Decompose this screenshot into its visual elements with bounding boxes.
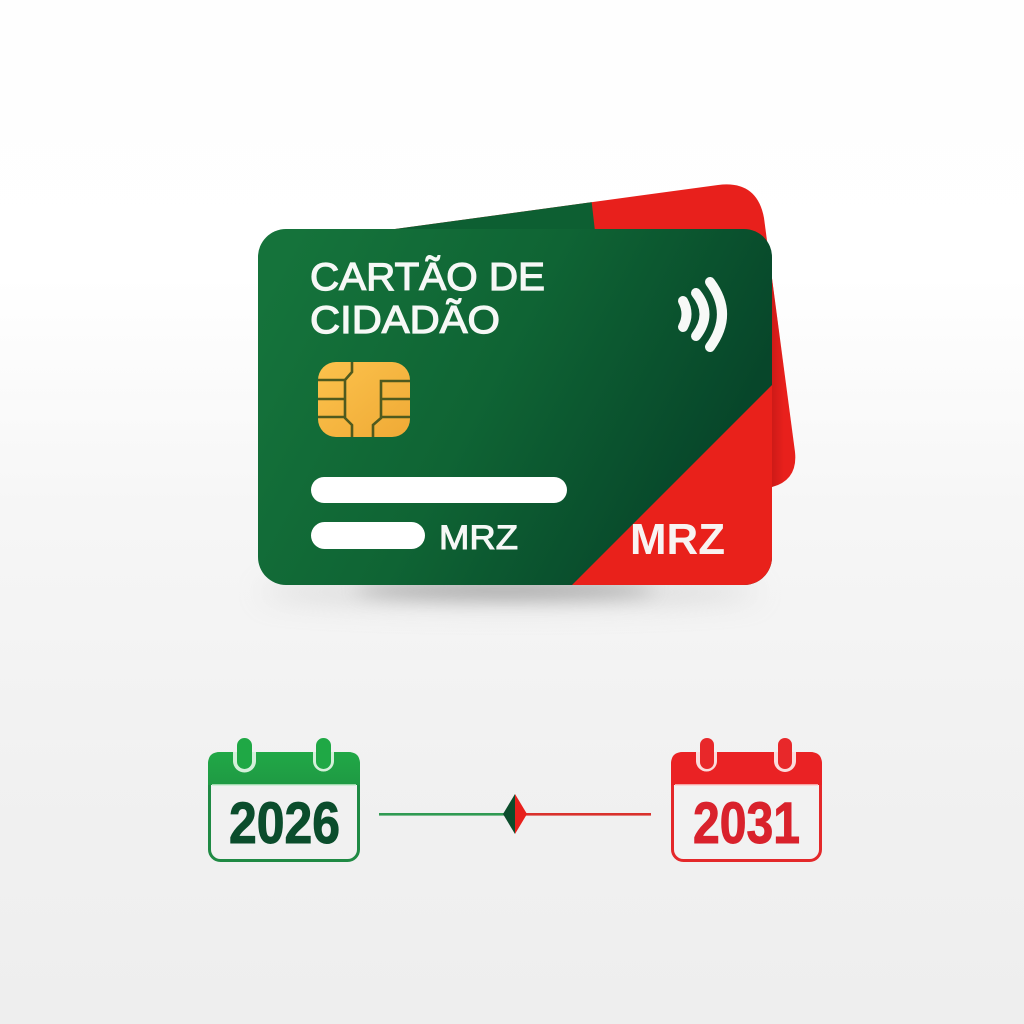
marker diamond: [503, 794, 527, 834]
timeline: [208, 738, 822, 860]
card title: CARTÃO DE: [310, 256, 545, 299]
label: MRZ small: MRZ: [439, 519, 518, 557]
illustration: stacked citizen cards: [258, 170, 810, 585]
calendar 2026: [208, 738, 360, 860]
back card: [395, 184, 796, 487]
calendar 2031: 2031: [693, 791, 800, 856]
label: MRZ large: MRZ: [630, 515, 725, 564]
calendar 2026: 2026: [229, 791, 340, 856]
red corner triangle: [572, 385, 772, 585]
card shadow: [260, 580, 760, 604]
front card: [258, 229, 772, 585]
card title: [310, 256, 545, 342]
connector line red: [523, 813, 651, 816]
card title: CIDADÃO: [310, 299, 500, 342]
icon: contactless waves: [683, 282, 722, 347]
name bar: [311, 477, 567, 503]
connector line green: [379, 813, 507, 816]
icon: chip: [318, 362, 410, 437]
short bar: [311, 522, 425, 549]
calendar 2031: [671, 738, 822, 860]
